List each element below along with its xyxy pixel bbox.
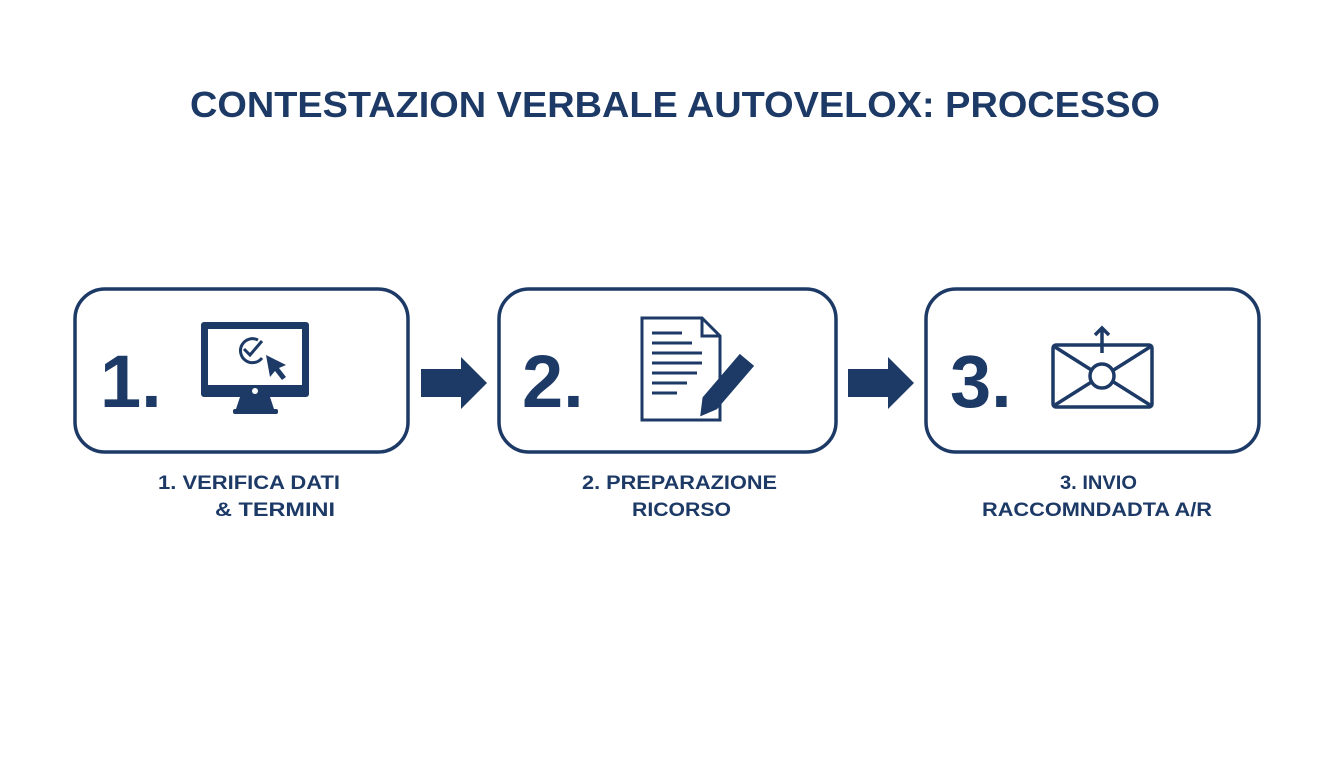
arrow 1 [421, 357, 487, 409]
icon: document with pen [642, 318, 752, 420]
panel: step 1 [75, 289, 408, 452]
title: CONTESTAZION VERBALE AUTOVELOX: PROCESSO [190, 84, 1160, 125]
panel: step 2 [499, 289, 836, 452]
panel: step 3 [926, 289, 1259, 452]
label 2: 2. PREPARAZIONE [582, 473, 777, 494]
number 1: 1. [100, 340, 162, 423]
label 1: & TERMINI [215, 500, 335, 521]
label 2: RICORSO [632, 500, 731, 521]
label 3: 3. INVIO [1060, 473, 1137, 494]
label 3: RACCOMNDADTA A/R [982, 500, 1212, 521]
arrow 2 [848, 357, 914, 409]
number 3: 3. [950, 340, 1012, 423]
icon: monitor with check [201, 322, 309, 414]
label 1: 1. VERIFICA DATI [158, 473, 340, 494]
number 2: 2. [522, 340, 584, 423]
icon: envelope [1053, 328, 1152, 407]
